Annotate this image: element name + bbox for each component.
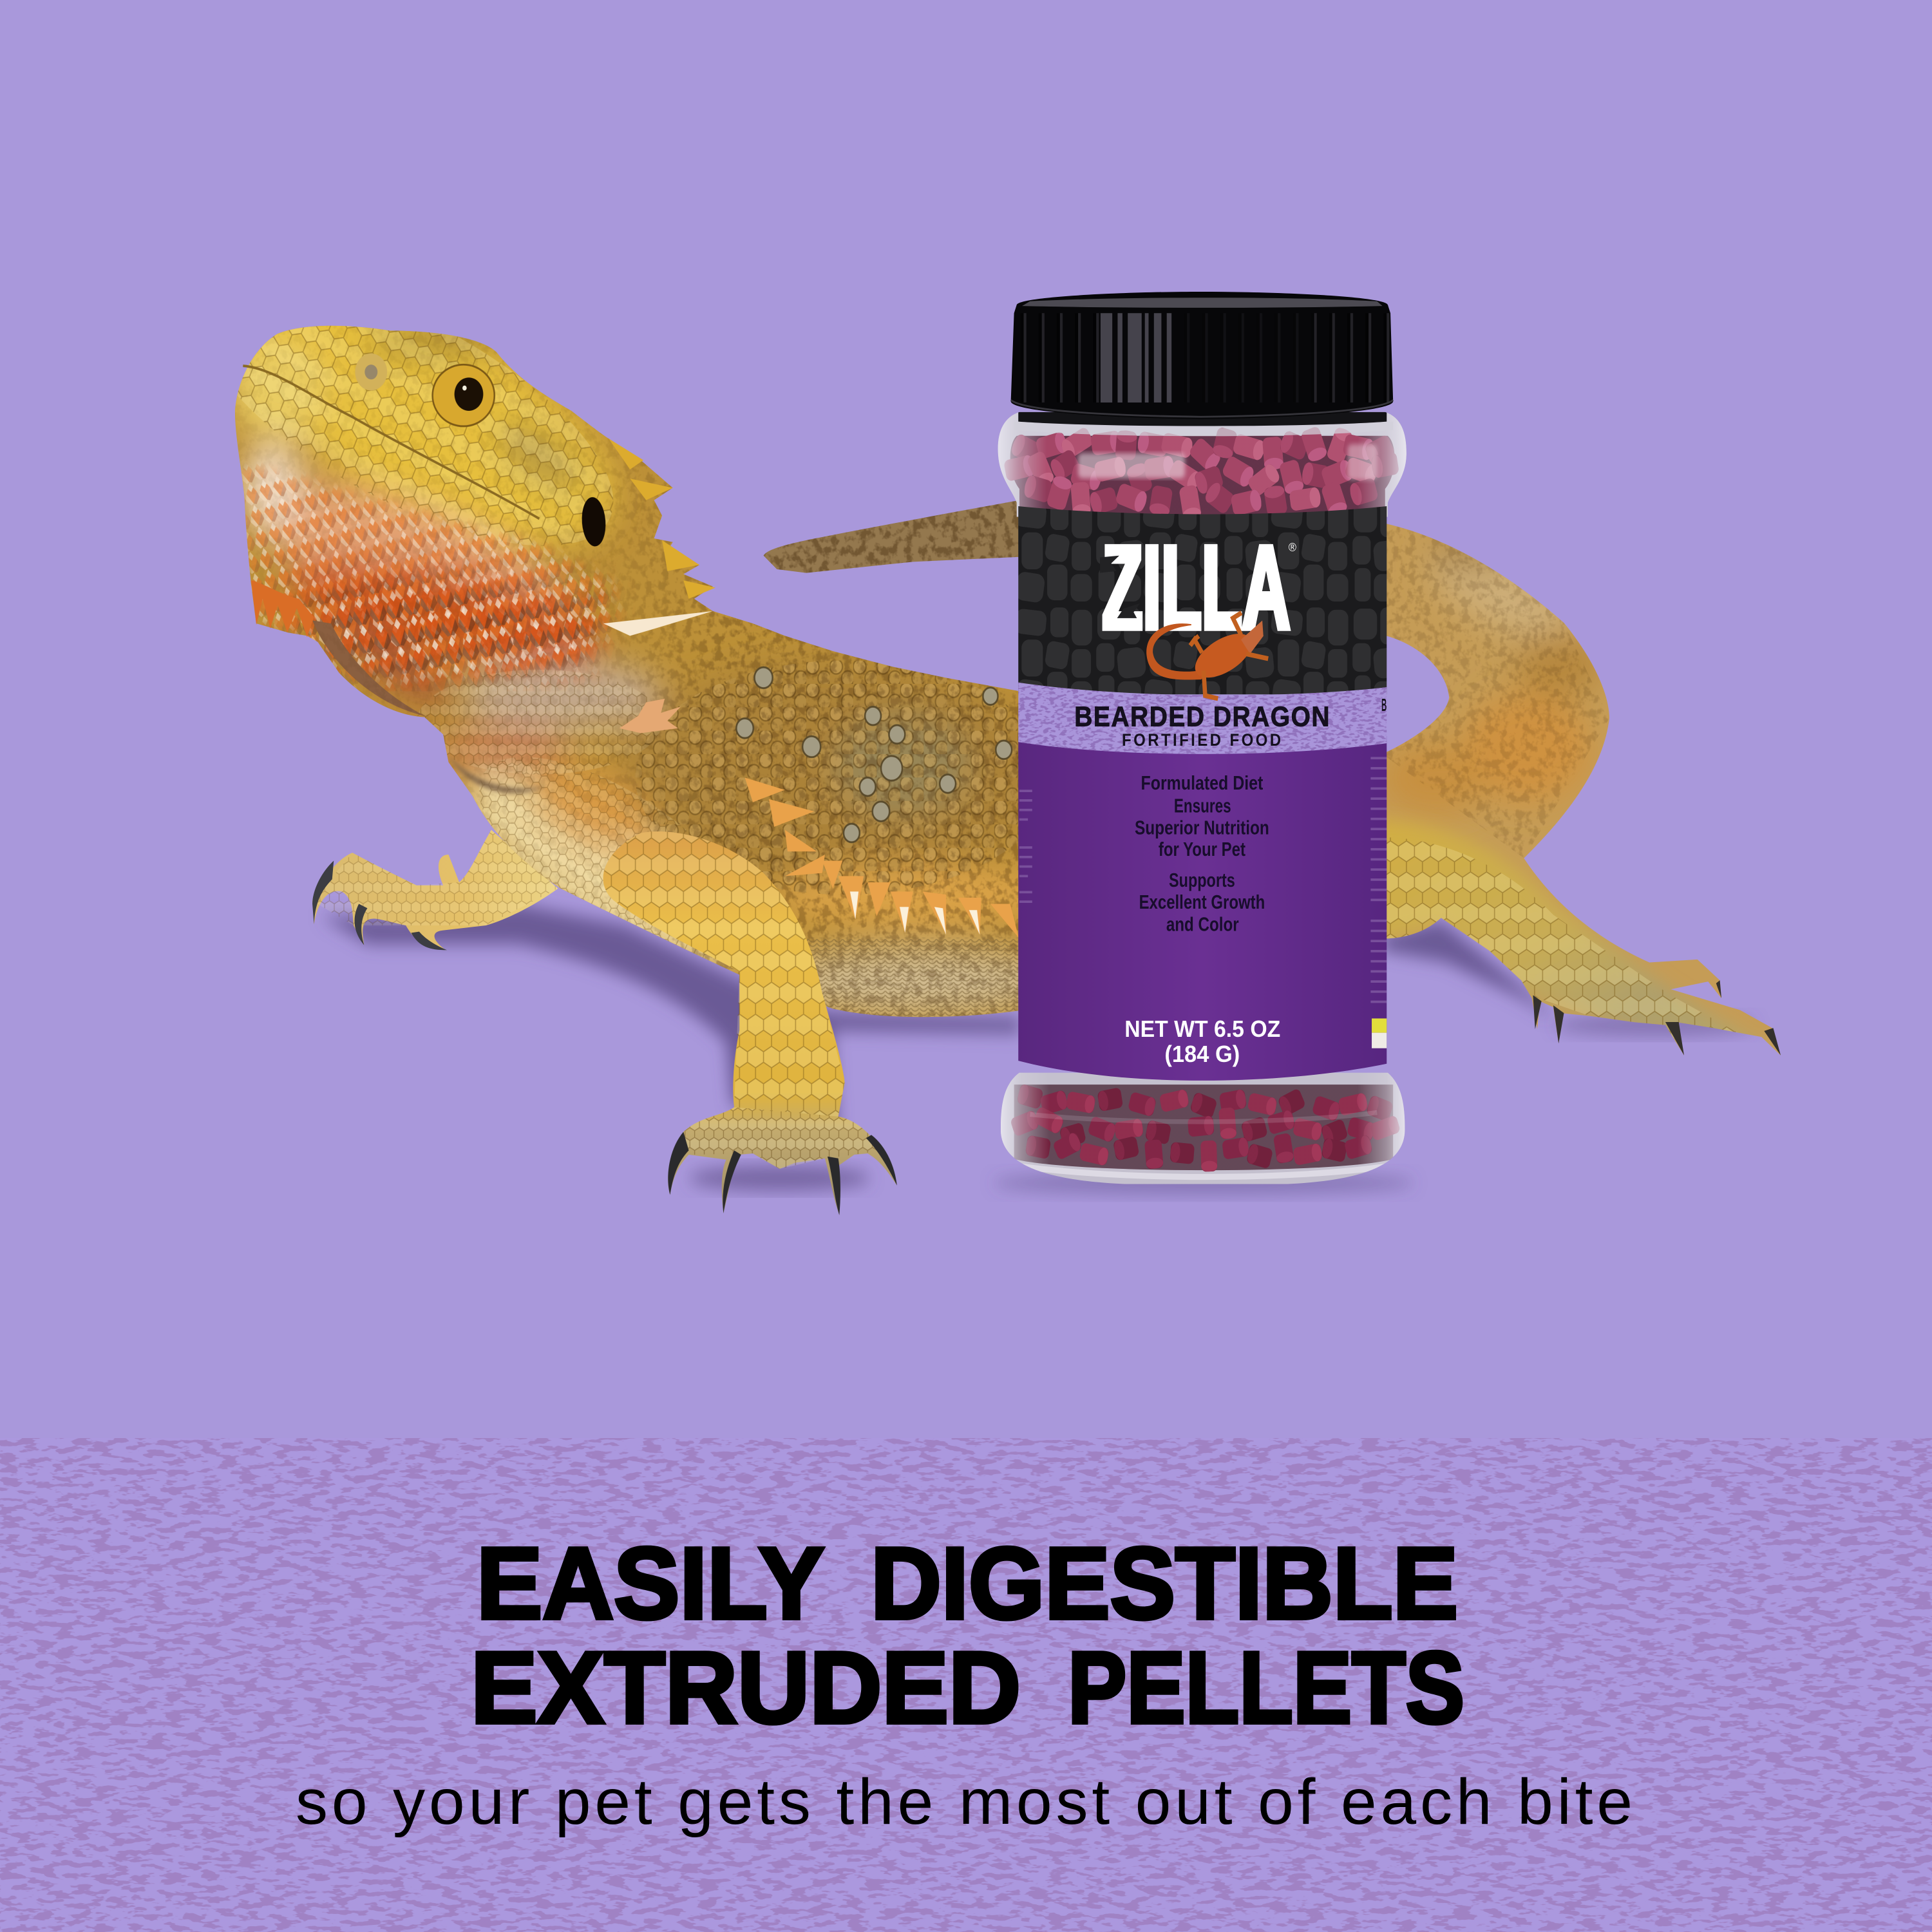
illustration: bearded dragon: [234, 326, 1781, 1215]
net weight: NET WT 6.5 OZ: [1124, 1017, 1280, 1043]
rear foot claws: [1533, 980, 1781, 1056]
beard upper scales: [242, 463, 618, 685]
tail tip behind jar: [764, 500, 1020, 573]
jaw spines: [603, 611, 713, 733]
heading: DIGESTIBLE: [871, 1527, 1458, 1640]
tail curve and rear leg: [1387, 524, 1781, 1056]
side spines: [745, 777, 1019, 938]
benefit one: Superior Nutrition: [1135, 817, 1269, 839]
head and body: [234, 326, 1019, 1018]
right leg and jar shadows: [992, 921, 1756, 1195]
near foot scales: [683, 1107, 881, 1169]
panel: textured caption band: [0, 1438, 1932, 1932]
product subtitle: FORTIFIED FOOD: [1122, 731, 1281, 750]
label purple body: [1018, 736, 1387, 1081]
crown spikes: [609, 439, 715, 599]
subheading: so your pet gets the most out of each bite: [296, 1766, 1633, 1838]
upper glass with pellets: [992, 397, 1414, 522]
beard lower spikes: [273, 556, 623, 692]
product jar: [992, 292, 1414, 1189]
lower glass with pellets: [996, 1066, 1412, 1189]
far foot claws: [312, 861, 447, 950]
heading: EXTRUDED: [471, 1631, 1021, 1745]
brand logo: ®: [1289, 540, 1296, 554]
benefit one: Ensures: [1174, 795, 1231, 817]
benefit one: for Your Pet: [1159, 839, 1245, 860]
grey nodules: [736, 667, 1012, 842]
neck folds: [448, 756, 545, 793]
belly scales: [801, 938, 1025, 1024]
ground shadows: [321, 904, 1020, 1191]
label: [1018, 506, 1387, 1081]
eye: [433, 365, 495, 426]
cap: [1011, 292, 1393, 419]
ear opening: [580, 496, 607, 547]
throat scales: [417, 670, 662, 775]
near front leg: [603, 831, 897, 1215]
benefit one: [1135, 773, 1269, 860]
heading: [471, 1527, 1464, 1745]
chest scales: [479, 757, 712, 958]
dorsal scales: [636, 660, 1052, 895]
brand logo: ZILLA: [1102, 522, 1290, 653]
benefit two: Excellent Growth: [1139, 892, 1265, 914]
benefit two: and Color: [1166, 914, 1239, 936]
label dark top with scale pattern: [1018, 506, 1387, 694]
net weight: (184 G): [1164, 1041, 1240, 1067]
benefit one: Formulated Diet: [1141, 773, 1264, 795]
near foot claws: [668, 1132, 897, 1215]
head scales: [237, 326, 613, 546]
brand logo: [1100, 522, 1296, 653]
warning sticker: [1372, 1018, 1387, 1048]
nostril: [355, 354, 387, 390]
net weight: [1124, 1017, 1280, 1067]
product name: BEARDED DRAGON: [1074, 701, 1330, 732]
benefit two: Supports: [1169, 870, 1235, 891]
heading: EASILY: [477, 1527, 824, 1640]
product jar: B: [1381, 695, 1387, 715]
chin fringe: [251, 580, 314, 637]
label lavender band: [1018, 683, 1387, 754]
mouth line: [243, 366, 539, 518]
heading: PELLETS: [1068, 1631, 1464, 1745]
benefit two: [1139, 870, 1265, 936]
far front leg: [312, 830, 558, 950]
side directions text: [1019, 757, 1387, 1003]
logo lizard mark: [1146, 613, 1268, 699]
